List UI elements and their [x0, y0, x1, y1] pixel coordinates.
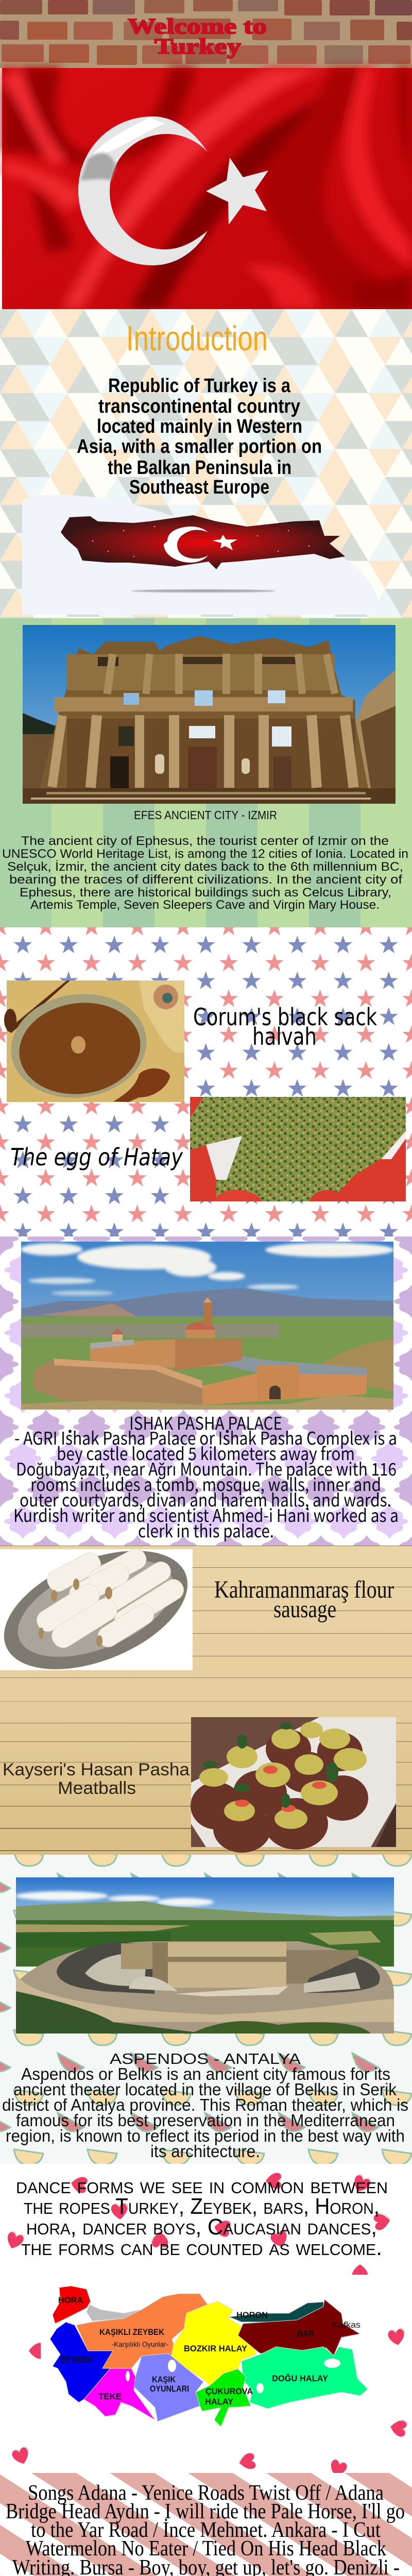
text: ephesus description: Selçuk, İzmir, the ancient city dates back to the 6th millennium BC,	[7, 860, 403, 874]
panel: white section with hearts	[0, 2164, 412, 2479]
text: kahramanmaras flour sausage: sausage	[273, 1596, 336, 1623]
photo: hasan pasha meatballs	[191, 1717, 396, 1853]
shadow below map	[131, 589, 276, 592]
text: aspendos description: ancient theater located in the village of Belkıs in Serik	[13, 2080, 397, 2099]
map labels: HALAY	[205, 2397, 234, 2406]
text: kayseri's hasan pasha meatballs: Kayseri's Hasan Pasha	[3, 1760, 190, 1780]
text: introduction paragraph: Republic of Turkey is a	[108, 375, 291, 397]
text: songs list	[6, 2481, 405, 2576]
photo: hatay egg dish	[190, 1097, 406, 1201]
panel: wood plank background	[0, 1546, 412, 1855]
panel: brick wall header	[0, 0, 412, 68]
text: ishak pasha palace description: clerk in this palace.	[138, 1517, 274, 1543]
text: kayseri's hasan pasha meatballs: Meatballs	[58, 1778, 136, 1798]
map labels: ZEYBEK	[60, 2354, 94, 2364]
heading: introduction: Introduction	[126, 319, 268, 358]
map labels: -Karşılıklı Oyunlar-	[112, 2340, 168, 2348]
panel: introduction background	[0, 309, 412, 618]
text: corum's black sack halvah	[193, 1003, 377, 1050]
text: kayseri's hasan pasha meatballs	[3, 1760, 190, 1798]
text: the egg of hatay: The egg of Hatay	[10, 1143, 183, 1171]
photo: aspendos theatre	[15, 1877, 394, 2033]
map labels: TEKE	[98, 2392, 122, 2401]
text: ishak pasha palace description	[13, 1410, 399, 1543]
icon: flag crescent	[78, 116, 208, 265]
map labels: HORON	[236, 2310, 268, 2320]
text: introduction paragraph: Southeast Europe	[129, 477, 269, 498]
panel: lilac pattern background	[0, 1236, 412, 1546]
text: ephesus description: Ephesus, there are historical buildings such as Celcus Library,	[20, 886, 391, 900]
panel: green striped efes section	[0, 618, 412, 927]
map labels: HORA	[58, 2295, 83, 2305]
panel: waving turkish flag	[2, 68, 412, 309]
text: introduction paragraph: transcontinental country	[98, 396, 300, 417]
text: ephesus description: bearing the traces of different civilizations. In the ancient city of	[9, 873, 402, 887]
title: welcome to turkey	[128, 15, 267, 59]
text: aspendos description: its architecture.	[150, 2142, 260, 2161]
text: dance forms: dance forms we see in common between	[16, 2173, 388, 2198]
map labels: KAŞIK	[152, 2375, 176, 2384]
text: dance forms: the ropes Turkey, Zeybek, bars, Horon,	[24, 2194, 380, 2219]
panel: stars background	[0, 927, 412, 1236]
map: regional dances of turkey	[41, 2275, 386, 2442]
map labels: ÇUKUROVA	[205, 2386, 253, 2396]
text: aspendos description: famous for its best preservation in the Mediterranean	[16, 2111, 395, 2130]
text: aspendos description	[2, 2064, 408, 2161]
icon: flag star	[206, 158, 268, 225]
logo: ataturk ortaokulu	[0, 0, 86, 2576]
panel: diagonal pink stripes background	[0, 2473, 412, 2576]
text: ishak pasha palace description: ISHAK PASHA PALACE	[129, 1410, 282, 1435]
title: welcome to turkey: Welcome to	[128, 15, 267, 39]
panel: watermelon pattern background	[0, 1855, 412, 2164]
map labels: BAR	[297, 2329, 314, 2338]
photo: kahramanmaras flour sausage	[0, 1527, 204, 1693]
text: introduction paragraph: Asia, with a smaller portion on	[77, 436, 322, 457]
map labels: BOZKIR HALAY	[184, 2344, 248, 2353]
photo: ishak pasha palace	[21, 1242, 394, 1410]
photo: black sack halvah	[4, 980, 184, 1106]
text: introduction paragraph: the Balkan Peninsula in	[108, 457, 291, 479]
text: ephesus description: UNESCO World Heritage List, is among the 12 cities of Ionia. Located in	[2, 847, 408, 861]
text: ephesus description	[2, 834, 408, 912]
map labels: KAŞIKLI ZEYBEK	[99, 2327, 165, 2337]
text: kahramanmaras flour sausage	[214, 1576, 394, 1623]
map labels: OYUNLARI	[150, 2384, 189, 2394]
map labels: Kafkas	[332, 2320, 360, 2330]
map labels: DOĞU HALAY	[272, 2374, 329, 2383]
text: aspendos antalya: ASPENDOS - ANTALYA	[110, 2051, 301, 2067]
photo: library of celsus at ephesus	[23, 625, 396, 804]
map labels	[58, 2295, 360, 2406]
text: dance forms: hora, dancer boys, Caucasian dances,	[26, 2214, 377, 2240]
shape: white wave behind map	[22, 495, 381, 615]
text: dance forms: the forms can be counted as welcome.	[21, 2235, 382, 2260]
text: ephesus description: Artemis Temple, Seven Sleepers Cave and Virgin Mary House.	[30, 898, 380, 912]
text: introduction paragraph: located mainly in Western	[97, 416, 302, 437]
illustration: red map of turkey with flag	[61, 515, 345, 592]
text: aspendos description: Aspendos or Belkıs is an ancient city famous for its	[21, 2064, 390, 2083]
text: ephesus description: The ancient city of Ephesus, the tourist center of Izmir on the	[21, 834, 389, 848]
text: introduction paragraph	[77, 375, 322, 498]
text: dance forms	[16, 2173, 388, 2260]
text: ishak pasha palace description: bey castle located 5 kilometers away from	[57, 1440, 355, 1465]
title: welcome to turkey: Turkey	[154, 35, 241, 59]
text: corum's black sack halvah: halvah	[252, 1023, 317, 1050]
caption: efes ancient city: EFES ANCIENT CITY - IZMIR	[134, 808, 277, 822]
